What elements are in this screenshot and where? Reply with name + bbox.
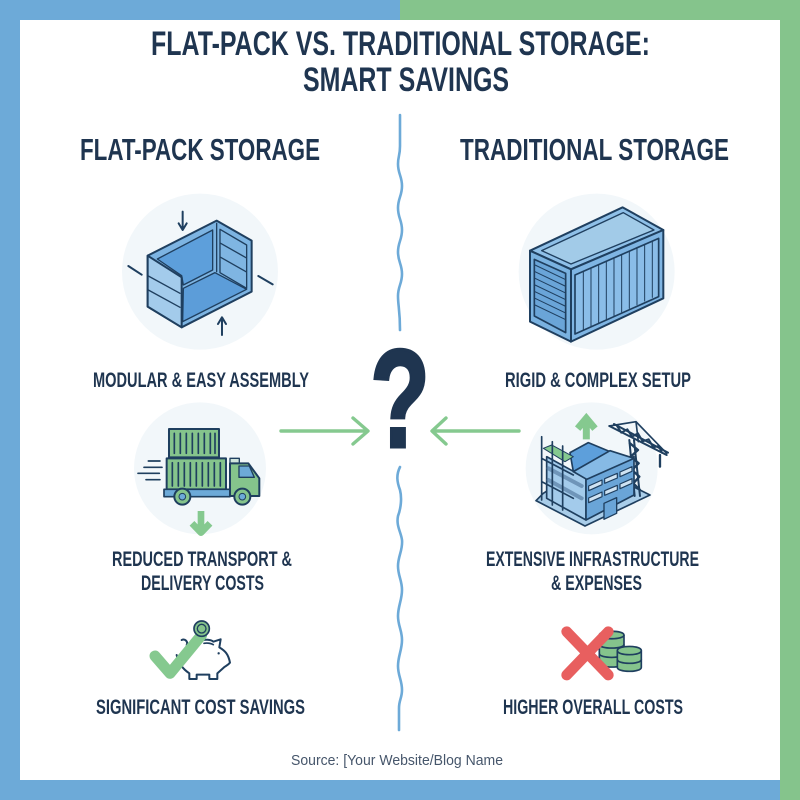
label: higher overall costs: HIGHER OVERALL COSTS [503, 696, 683, 719]
icon: shipping container [519, 194, 675, 350]
label: reduced transport and delivery costs: DELIVERY COSTS [141, 572, 264, 595]
label: modular and easy assembly: MODULAR & EASY ASSEMBLY [93, 369, 309, 392]
label: reduced transport and delivery costs [112, 548, 292, 595]
title: SMART SAVINGS [303, 61, 509, 99]
source line: Source: [Your Website/Blog Name [291, 753, 503, 769]
icon: flat-pack container [122, 194, 278, 350]
label: reduced transport and delivery costs: REDUCED TRANSPORT & [112, 548, 292, 571]
arrow: left to center [281, 418, 368, 444]
panel: flat-pack storage [80, 132, 320, 719]
label: rigid and complex setup: RIGID & COMPLEX SETUP [505, 369, 691, 392]
icon: piggy bank with check mark [155, 621, 230, 679]
heading: flat-pack storage: FLAT-PACK STORAGE [80, 132, 320, 167]
arrow: right to center [432, 418, 519, 444]
panel: traditional storage [460, 132, 729, 719]
label: extensive infrastructure and expenses [486, 548, 699, 595]
icon: delivery truck with down arrow [134, 402, 266, 534]
wavy center divider [397, 115, 402, 730]
icon: building under construction with crane [526, 402, 668, 534]
label: extensive infrastructure and expenses: EXTENSIVE INFRASTRUCTURE [486, 548, 699, 571]
label: significant cost savings: SIGNIFICANT COST SAVINGS [96, 696, 305, 719]
label: extensive infrastructure and expenses: & EXPENSES [551, 572, 642, 595]
icon: red cross with coin stacks [567, 631, 641, 675]
center question mark: ? [370, 321, 430, 477]
title [151, 25, 650, 99]
